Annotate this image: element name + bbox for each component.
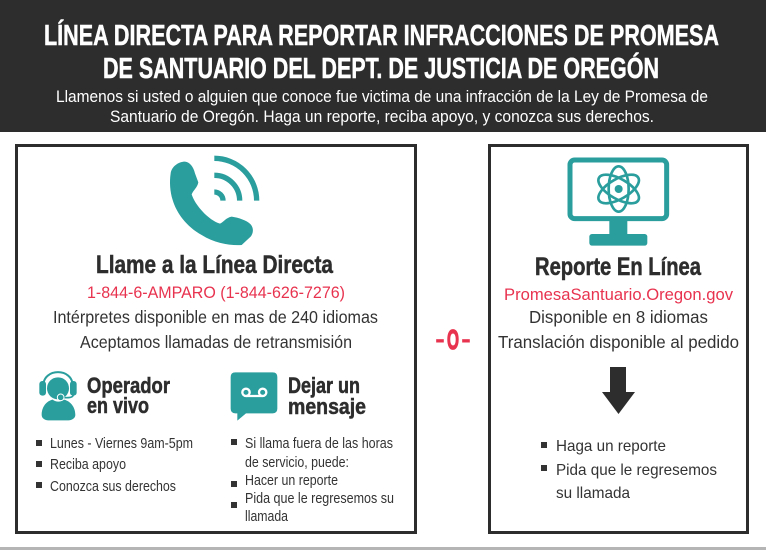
separator: or (435, 323, 471, 355)
panel: online report (490, 146, 748, 532)
list: leave message: Si llama fuera de las horas (245, 435, 393, 452)
heading: hotline: Llame a la Línea Directa (96, 251, 334, 279)
hotline details (53, 307, 378, 352)
icon: operator (39, 372, 77, 420)
list: online actions (541, 438, 717, 502)
separator: or: - (435, 323, 445, 354)
subtitle: Santuario de Oregón. Haga un reporte, reciba apoyo, y conozca sus derechos. (110, 108, 654, 126)
heading: leave message (288, 373, 366, 419)
list: online actions: su llamada (556, 485, 630, 502)
online details: Translación disponible al pedido (498, 332, 739, 352)
separator: or: - (461, 323, 471, 354)
list: leave message: Hacer un reporte (245, 472, 338, 489)
icon: phone (170, 158, 257, 245)
heading: live operator (87, 373, 170, 418)
list: live operator: Reciba apoyo (50, 456, 126, 473)
list: leave message: Pida que le regresemos su (245, 490, 394, 507)
list: online actions: Pida que le regresemos (556, 462, 717, 479)
list: live operator (36, 435, 193, 495)
icon: voicemail (231, 372, 277, 421)
heading: online report: Reporte En Línea (535, 253, 702, 281)
arrow: down (602, 367, 635, 414)
list: online actions: Haga un reporte (556, 438, 666, 455)
heading: leave message: mensaje (288, 394, 366, 419)
website: PromesaSantuario.Oregon.gov (504, 285, 733, 304)
list: leave message: de servicio, puede: (245, 454, 349, 471)
icon: monitor with atom (570, 160, 667, 246)
subtitle: Llamenos si usted o alguien que conoce fue victima de una infracción de la Ley de Promesa de (56, 88, 708, 106)
header banner (0, 0, 766, 132)
list: live operator: Conozca sus derechos (50, 478, 176, 495)
phone number: 1-844-6-AMPARO (1-844-626-7276) (87, 283, 345, 302)
hotline details: Intérpretes disponible en mas de 240 idiomas (53, 307, 378, 327)
list: leave message: llamada (245, 508, 289, 525)
list: live operator: Lunes - Viernes 9am-5pm (50, 435, 193, 452)
heading: leave message: Dejar un (288, 373, 360, 398)
title (44, 18, 719, 85)
separator: or: O (447, 324, 459, 355)
list: leave message (231, 435, 394, 525)
online details (498, 307, 739, 352)
heading: live operator: Operador (87, 373, 170, 398)
hotline details: Aceptamos llamadas de retransmisión (80, 332, 352, 352)
subtitle (56, 88, 708, 126)
heading: live operator: en vivo (87, 393, 149, 418)
panel: hotline (16, 146, 416, 532)
online details: Disponible en 8 idiomas (529, 307, 708, 327)
